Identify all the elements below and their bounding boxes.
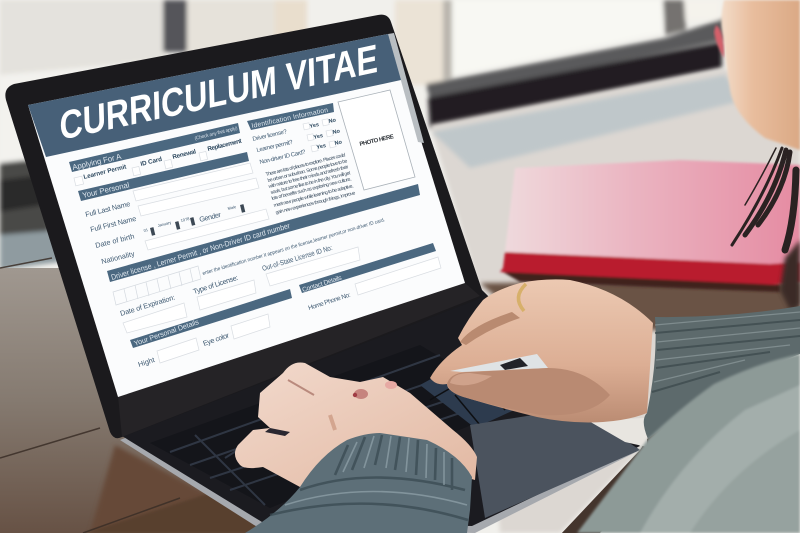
person: right hand with ring xyxy=(430,279,653,422)
section: applying for a: Renewal xyxy=(172,148,197,161)
person: right sleeve xyxy=(644,306,800,439)
section: applying for a: Learner Permit xyxy=(83,163,128,181)
paragraph: meet new people while learning to be adaptive, xyxy=(273,183,354,209)
section: your personal details xyxy=(130,289,292,369)
section: driver license: Type of License: xyxy=(192,273,239,296)
section: your personal: Gender xyxy=(198,210,222,224)
paragraph: souls, but some like to be in the city. You will get xyxy=(270,170,352,196)
person: face and hair xyxy=(714,0,800,310)
section: identification information: No xyxy=(334,139,343,147)
section: identification information: Identification Information xyxy=(251,107,329,130)
section: contact details xyxy=(299,243,441,312)
form: CV fields xyxy=(69,90,441,369)
section: your personal details: Hight xyxy=(137,355,156,369)
section: driver license: enter the identification number it appears on the license,learner permit,or non-driver ID card. xyxy=(202,217,386,277)
section: your personal: January xyxy=(157,220,172,228)
person: left hand xyxy=(235,362,477,487)
section: identification information: Yes xyxy=(316,143,327,151)
section: driver license: Driver license , Lerner Permit , or Non-Driver ID card number xyxy=(110,221,291,282)
section: contact details: Home Phone No: xyxy=(307,292,352,312)
section: identification information xyxy=(247,103,343,166)
section: driver license: Out-of-State License ID No: xyxy=(261,243,333,273)
section: driver license xyxy=(107,184,420,333)
section: applying for a: Replacement xyxy=(207,137,243,153)
section: your personal xyxy=(78,152,269,266)
paragraph: with nature to free their minds and refresh their xyxy=(268,164,349,190)
paragraph: gain new experiences through things, improve xyxy=(275,190,356,216)
section: driver license: Date of Expiration: xyxy=(119,293,176,318)
section: identification information: No xyxy=(332,128,341,136)
paragraph: lots of benefits such as exploring new culture, xyxy=(271,176,352,202)
laptop base and keyboard xyxy=(120,290,647,533)
section: your personal: 1978 xyxy=(180,216,191,223)
section: applying for a: (Check any that apply) xyxy=(194,125,238,142)
section: your personal: Male xyxy=(227,204,237,211)
section: contact details: Contact Details xyxy=(301,274,343,294)
section: identification information: No xyxy=(328,117,337,125)
section: your personal: Full First Name xyxy=(89,214,137,234)
paragraph: be urban or suburban. Some people love to be xyxy=(267,158,348,184)
section: your personal: Your Personal xyxy=(81,180,130,200)
photo placeholder xyxy=(338,90,415,190)
person: shoulder in grey sweater xyxy=(577,354,800,533)
paragraph xyxy=(265,152,356,216)
section: applying for a: Applying For A xyxy=(71,152,123,172)
paragraph: There are lots of places to explore. Places could xyxy=(265,152,346,178)
section: identification information: Yes xyxy=(309,122,320,130)
section: your personal: Nationality xyxy=(100,249,136,266)
section: your personal: 01 xyxy=(143,227,149,233)
pink notebook with red spine xyxy=(500,160,800,292)
section: identification information: Driver license? xyxy=(252,129,288,143)
section: your personal details: Eye color xyxy=(202,330,231,348)
laptop lid xyxy=(5,15,482,438)
section: identification information: Yes xyxy=(313,133,324,141)
photo placeholder: PHOTO HERE xyxy=(359,134,395,148)
section: applying for a xyxy=(69,123,243,186)
laptop screen xyxy=(28,33,465,397)
section: applying for a: ID Card xyxy=(140,156,163,168)
section: your personal: Full Last Name xyxy=(84,199,131,219)
section: identification information: Learner permit? xyxy=(256,140,294,154)
section: your personal: Date of birth xyxy=(94,232,135,250)
section: your personal details: Your Personal Details xyxy=(133,317,200,348)
section: identification information: Non-driver ID Card? xyxy=(259,149,307,166)
person: left sleeve xyxy=(245,433,472,533)
title: CURRICULUM VITAE xyxy=(59,37,378,149)
screen header band xyxy=(28,34,401,157)
